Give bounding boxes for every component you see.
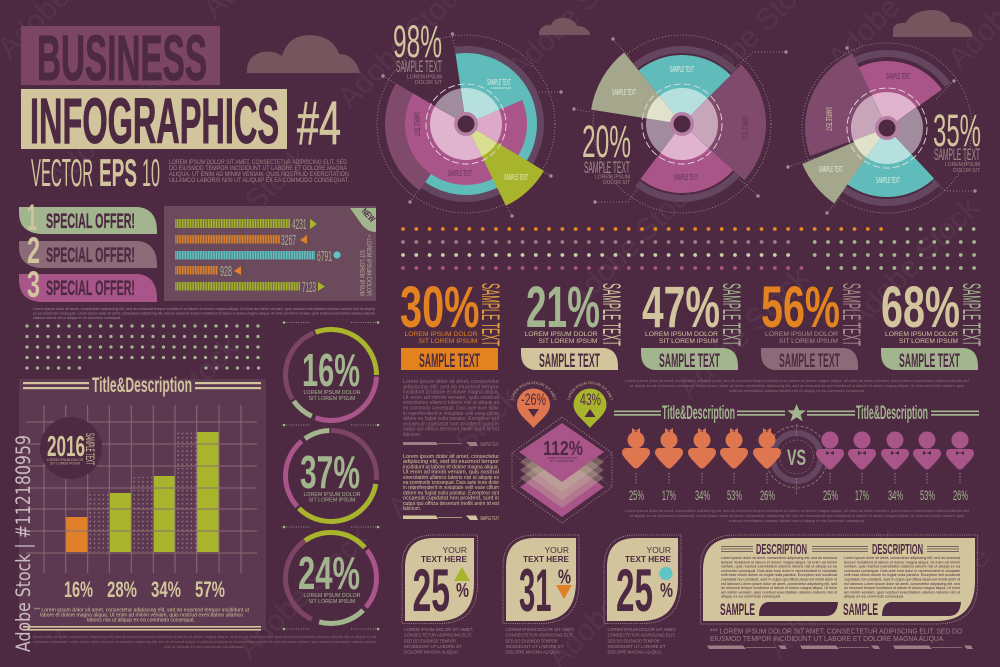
card 31% down (503, 535, 579, 624)
figure 4 (913, 432, 941, 503)
ring chart 24%: LOREM IPSUM DOLOR (304, 593, 360, 599)
sample pill 1 (720, 600, 838, 619)
right paragraph bottom: Lorem ipsum dolor sit amet, consectetur adipiscing elit, sed do eiusmod tempor incididunt ut labore et dolore magna aliqua. Ut enim ad minim veniam, quis nostrud exercitation ullamco laboris nisi (625, 508, 969, 513)
description column 2: veniam, quis nostrud exercitation ullamco laboris nisi ut aliquip ex ea (844, 565, 961, 569)
description column 2: commodo consequat. Duis aute irure dolor in reprehenderit in voluptate (844, 569, 960, 573)
vertical note: • LOREM IPSUM DOLOR (365, 235, 371, 297)
description column 1: cupidatat non proident, sunt in culpa qui officia deserunt mollit anim id (721, 578, 837, 582)
stat 47%: 47% (642, 275, 720, 340)
special offer 2: SPECIAL OFFER! (46, 244, 135, 267)
text block cream: ea commodo consequat. Duis aute irure dolor (403, 480, 499, 486)
stat 47%: SAMPLE TEXT (717, 283, 745, 346)
stat 21%: 21% (526, 275, 600, 340)
stock watermark pattern: Adobe Stock (42, 501, 186, 645)
pie labels: SAMPLE TEXT (612, 87, 636, 97)
stat 68%: 68% (881, 275, 960, 340)
text block cream: Lorem ipsum dolor sit amet, consectetur (403, 454, 499, 460)
stat 68% (881, 275, 985, 372)
right paragraph top (625, 378, 969, 393)
description card: DESCRIPTION (872, 541, 923, 558)
stat 47%: LOREM IPSUM DOLOR (645, 331, 718, 338)
caption 1: DOLORE MAGNA ALIQUA. (404, 650, 459, 656)
sample pill 1: SAMPLE (720, 600, 755, 619)
stock watermark pattern: Adobe Stock (842, 191, 986, 335)
figure 3 (688, 428, 716, 503)
caption 1: CONSECTETUR ADIPISCING ELIT, (404, 633, 472, 639)
stock watermark pattern: Adobe Stock (42, 51, 186, 195)
ring chart 16%: LOREM IPSUM DOLOR (304, 390, 360, 396)
panel: horizontal bars (164, 206, 378, 301)
stock watermark pattern: Adobe Stock (382, 381, 526, 525)
pie labels: SAMPLE TEXT (670, 64, 694, 74)
figure 5 (946, 432, 974, 503)
intro text: ULLAMCO LABORIS NISI UT ALIQUIP EX EA COMMODO CONSEQUAT. (169, 178, 349, 184)
description column 2: Lorem ipsum dolor sit amet, consectetur adipiscing elit, sed do eiusmod (844, 556, 960, 560)
stat 21% (521, 275, 625, 372)
layered diamond 112%: 112% (543, 438, 583, 460)
chart labels: 28% (107, 577, 137, 602)
pin 43% (567, 382, 613, 428)
stock credit vertical: Adobe Stock | #112180959 (12, 435, 35, 652)
caption 1: INCIDIDUNT UT LABORE ET (404, 644, 462, 650)
stat 56% (761, 275, 865, 372)
bar 3267 (175, 232, 307, 249)
separator cream: SAMPLE TEXT (480, 516, 499, 522)
text block cream: exercitation ullamco laboris nisi ut aliquip ex (403, 475, 499, 481)
description column 1: veniam, quis nostrud exercitation ullamco laboris nisi ut aliquip ex ea (721, 565, 838, 569)
description column 2: do eiusmod tempor incididunt ut labore et dolore magna aliqua. Ut enim (844, 586, 960, 590)
text block cream: Ut enim ad minim veniam, quis nostrud (403, 470, 499, 476)
caption 2 (506, 627, 574, 656)
stat 30%: 30% (400, 275, 480, 340)
card 25% up: YOUR (442, 545, 467, 555)
text block cream: culpa qui officia deserunt mollit anim id est (403, 501, 500, 507)
ring chart 37%: SIT LOREM IPSUM (308, 498, 356, 504)
stock watermark pattern: Adobe Stock (102, 331, 246, 475)
ring chart 16%: 16% (302, 344, 360, 396)
caption 3: INCIDIDUNT UT LABORE ET (608, 644, 666, 650)
stock watermark pattern: Adobe Stock (672, 261, 816, 405)
pie chart 20%: SAMPLE TEXT (584, 158, 630, 177)
stock watermark pattern: Adobe Stock (762, 521, 906, 665)
pin -26%: -26% (521, 390, 546, 409)
caption 3: LOREM IPSUM DOLOR SIT AMET, (608, 627, 676, 633)
description column 2: est laborum.Lorem ipsum dolor sit amet, consectetur adipiscing elit, sed (844, 582, 960, 586)
chart footnote (34, 608, 250, 624)
card 25% up (402, 535, 478, 624)
chart footnote: laboris nisi ut aliquip ex ea commodo consequat. (87, 618, 195, 624)
ring chart 37%: LOREM IPSUM DOLOR (304, 492, 360, 498)
description column 1: commodo consequat. Duis aute irure dolor in reprehenderit in voluptate (721, 569, 837, 573)
text block faded: Ut enim ad minim veniam, quis nostrud (403, 395, 499, 401)
sample pill 2: SAMPLE (843, 600, 878, 619)
dotted background bars (88, 430, 197, 552)
stat 21%: LOREM IPSUM DOLOR (524, 331, 598, 338)
stat 68%: SAMPLE TEXT (957, 283, 985, 346)
special offer 1 (19, 197, 157, 238)
chart labels: 34% (151, 577, 181, 602)
pie labels: SAMPLE TEXT (448, 168, 472, 178)
small text under offers: ullamco laboris nisi ut aliquip ex ea commodo consequat. (33, 315, 121, 320)
ring chart 37%: 37% (300, 446, 360, 498)
special offer 1: SPECIAL OFFER! (46, 210, 135, 233)
chart labels: 16% (64, 577, 93, 602)
separator faded (403, 442, 499, 448)
small text under chart: nisi ut aliquip ex ea commodo consequat. (164, 644, 244, 649)
caption 3 (608, 627, 676, 656)
pie labels: LOREM IPSUM (491, 86, 512, 90)
text block faded: exercitation ullamco laboris nisi ut aliquip ex (403, 400, 499, 406)
ring chart 24%: 24% (298, 547, 360, 599)
description column 1: velit esse cillum dolore eu fugiat nulla pariatur. Excepteur sint occaecat (721, 573, 837, 577)
subtitle: vector eps 10: VECTOR (31, 152, 93, 195)
ring separators (283, 321, 379, 630)
figure 2: 17% (855, 488, 869, 503)
chart footnote: labore et dolore magna aliqua. Ut enim ad minim veniam, quis nostrud exercitation ullamco (40, 612, 243, 618)
caption 1 (404, 627, 473, 656)
new badge: NEW (360, 206, 378, 224)
bar 7123: 7123 (302, 279, 316, 296)
card captions (404, 627, 676, 656)
card 31% down: 31 (519, 557, 552, 624)
ring chart 24%: SIT LOREM IPSUM (308, 599, 356, 605)
text block faded: occaecat cupidatat non proident, sunt in (403, 421, 499, 427)
small text under offers (33, 306, 375, 320)
pie chart 98%: 98% (393, 16, 442, 67)
footnote: *** LOREM IPSUM DOLOR SIT AMET, CONSECTETUR ADIPISCING ELIT, SED DO (710, 626, 962, 636)
text block faded: Lorem ipsum dolor sit amet, consectetur (403, 379, 499, 385)
stat 21%: SAMPLE TEXT (597, 283, 625, 346)
text block cream: incididunt ut labore et dolore magna aliqua. (403, 464, 499, 470)
pie chart 35% (782, 23, 992, 233)
text block cream: dolore eu fugiat nulla pariatur. Excepteur sint (403, 490, 500, 496)
bar 7123 (175, 279, 325, 296)
figure 5: 26% (953, 488, 968, 503)
icon: large cloud (247, 35, 360, 73)
description column 1: ad minim veniam, quis nostrud exercitation ullamco laboris nisi ut (721, 590, 837, 594)
pie labels: SAMPLE TEXT (824, 107, 834, 131)
dot grid left (27, 326, 259, 368)
year badge: 2016 (47, 431, 85, 463)
description column 2: aliquip ex ea commodo consequat. (844, 595, 904, 599)
stat 47% (641, 275, 745, 372)
footnote: EIUSMOD TEMPOR INCIDIDUNT UT LABORE ET DOLORE MAGNA ALIQUA. (710, 634, 945, 643)
title: Business (21, 22, 220, 94)
bar 928: 928 (220, 263, 232, 280)
text block faded: culpa qui officia deserunt mollit anim id est (403, 427, 500, 433)
year badge: LOREM IPSUM DOLOR (47, 458, 84, 462)
description column 1: est laborum.Lorem ipsum dolor sit amet, consectetur adipiscing elit, sed (721, 582, 837, 586)
pink figures (816, 432, 974, 503)
figure 5: 26% (760, 488, 775, 503)
right paragraph bottom: nostrud exercitation ullamco laboris nisi ut aliquip ex ea commodo consequat. (729, 518, 865, 523)
special offer 2: 2 (27, 230, 40, 271)
pin -26%: LOREM IPSUM DOLOR SIT AMET (510, 382, 556, 400)
text block faded: ea commodo consequat. Duis aute irure dolor (403, 406, 499, 412)
text block faded: dolore eu fugiat nulla pariatur. Excepteur sint (403, 416, 500, 422)
pie chart 98% (377, 16, 563, 218)
text block cream: occaecat cupidatat non proident, sunt in (403, 496, 499, 502)
vertical note (358, 235, 371, 297)
figure 1 (622, 428, 650, 503)
bar 3267: 3267 (281, 232, 296, 249)
separator cream (403, 516, 499, 522)
title: #4: #4 (297, 89, 341, 157)
pie labels (412, 77, 528, 182)
pie chart 20% (572, 19, 788, 229)
coral figures (622, 428, 781, 503)
stock watermark pattern: Adobe Stock (232, 521, 376, 665)
title: Infographics: INFOGRAPHICS (30, 85, 279, 157)
layered diamond 112% (512, 417, 612, 523)
card 25% circle: YOUR (646, 545, 671, 555)
text block cream: laborum. (403, 506, 421, 512)
description card: DESCRIPTION (756, 541, 807, 558)
stat 21%: SAMPLE TEXT (539, 351, 600, 372)
caption 3: SED DO EIUSMOD TEMPOR (608, 638, 660, 644)
right paragraph bottom (625, 508, 969, 523)
text block cream: adipiscing elit, sed do eiusmod tempor (403, 459, 499, 465)
description column 2: ad minim veniam, quis nostrud exercitation ullamco laboris nisi ut (844, 590, 960, 594)
special offer 3: 3 (27, 264, 40, 305)
stat 30% (400, 275, 504, 372)
separator bars (707, 646, 973, 649)
vs badge: VS (787, 445, 806, 470)
card 31% down: TEXT HERE (523, 555, 570, 564)
footnote (710, 626, 962, 643)
card 25% circle: 25 (616, 557, 653, 624)
stock watermark pattern: Adobe Stock (172, 141, 316, 285)
pie chart 98%: LOREM IPSUM (407, 74, 442, 80)
text block faded (403, 379, 500, 438)
sample pill 2 (843, 600, 961, 619)
pie labels: SAMPLE TEXT (412, 112, 422, 136)
text block cream (403, 454, 500, 512)
stat 30%: SAMPLE TEXT (419, 351, 480, 372)
caption 2: SED DO EIUSMOD TEMPOR (506, 638, 558, 644)
icon: star (787, 404, 806, 421)
ring chart 16% (268, 312, 394, 438)
bar 4231 (175, 216, 317, 233)
stat 30%: SAMPLE TEXT (476, 283, 504, 346)
description column 1: do eiusmod tempor incididunt ut labore et dolore magna aliqua. Ut enim (721, 586, 837, 590)
stat 56%: LOREM IPSUM DOLOR (765, 331, 838, 338)
figure 2: 17% (662, 488, 676, 503)
pie chart 20%: LOREM IPSUM (595, 174, 630, 180)
pin 43%: LOREM IPSUM DOLOR SIT AMET (567, 382, 613, 400)
card 25% up: 25 (412, 557, 450, 624)
pie labels: SAMPLE TEXT (487, 77, 511, 87)
stat 56%: SIT LOREM IPSUM (779, 338, 838, 345)
bar 6791 (175, 248, 341, 265)
pie labels: SAMPLE TEXT (740, 116, 750, 140)
icon: cloud right (893, 10, 972, 37)
ring chart 16%: SIT LOREM IPSUM (308, 396, 356, 402)
small text under offers: Lorem ipsum dolor sit amet, consectetur adipiscing elit, sed do eiusmod tempor incididunt ut labore et dolore magna aliqua. Ut enim ad minim veniam, quis nostrud exercitation ullamco laboris nisi ut aliquip (33, 306, 375, 311)
pie chart 98%: DOLOR SIT (415, 80, 442, 86)
pie chart 98%: SAMPLE TEXT (396, 57, 442, 76)
title row left: Title&Description (662, 403, 735, 424)
text block faded: incididunt ut labore et dolore magna aliqua. (403, 390, 499, 396)
description column 2 (844, 556, 961, 599)
ring chart 24% (267, 514, 395, 642)
stock watermark pattern: Adobe (912, 540, 996, 625)
caption 1: SED DO EIUSMOD TEMPOR (404, 638, 456, 644)
card 25% circle: % (660, 580, 673, 602)
right paragraph bottom: ut aliquip ex ea commodo consequat. Lorem ipsum dolor sit amet, consectetur adipiscing elit, sed do eiusmod tempor incididunt ut labore et dolore magna aliqua. Ut enim ad minim veniam, quis (630, 513, 964, 518)
year badge: SAMPLE TEXT (83, 433, 97, 465)
description card (700, 535, 978, 624)
figure 4 (720, 428, 748, 503)
text block faded: laborum. (403, 432, 421, 438)
description column 1 (721, 556, 838, 599)
stat 56%: SAMPLE TEXT (779, 351, 840, 372)
separator faded: SAMPLE TEXT (480, 442, 499, 448)
icon: cloud middle (539, 18, 590, 35)
intro text (169, 160, 349, 184)
small text under offers: ex ea commodo consequat. Lorem ipsum dolor sit amet, consectetur adipiscing elit, sed do eiusmod tempor incididunt ut labore et dolore magna aliqua. Ut enim ad minim veniam, quis nostrud exercitation ullamco laboris (33, 310, 375, 316)
caption 2: INCIDIDUNT UT LABORE ET (506, 644, 564, 650)
stat 56%: SAMPLE TEXT (837, 283, 865, 346)
stat 47%: SIT LOREM IPSUM (659, 338, 718, 345)
stat 68%: LOREM IPSUM DOLOR (885, 331, 958, 338)
pie labels (819, 71, 910, 185)
description column 1: tempor incididunt ut labore et dolore magna aliqua. Ut enim ad minim (721, 560, 837, 564)
intro text: LOREM IPSUM DOLOR SIT AMET, CONSECTETUR ADIPISCING ELIT, SED (169, 160, 348, 166)
bar 6791: 6791 (317, 248, 332, 265)
description column 2: velit esse cillum dolore eu fugiat nulla pariatur. Excepteur sint occaecat (844, 573, 960, 577)
caption 1: LOREM IPSUM DOLOR SIT AMET, (404, 627, 473, 633)
dot grid right (403, 229, 975, 268)
year badge (40, 417, 102, 479)
caption 2: DOLORE MAGNA ALIQUA. (506, 650, 560, 656)
figure 4: 53% (727, 488, 742, 503)
subtitle: vector eps 10: EPS (99, 152, 137, 195)
text: 10 (142, 152, 160, 195)
new badge (350, 206, 378, 232)
figure 1: 25% (823, 488, 838, 503)
card 25% circle: TEXT HERE (625, 555, 672, 564)
pie labels (612, 64, 750, 182)
figure 1: 25% (629, 488, 644, 503)
title: Business: BUSINESS (37, 22, 207, 94)
description column 2: cupidatat non proident, sunt in culpa qui officia deserunt mollit anim id (844, 578, 960, 582)
card 31% down: % (558, 566, 571, 588)
special offer 3 (19, 264, 157, 305)
caption 2: LOREM IPSUM DOLOR SIT AMET, (506, 627, 574, 633)
small text under chart: ipsum dolor sit amet, consectetur adipiscing elit, sed do eiusmod tempor incididunt ut labore et dolore magna aliqua. Ut enim ad minim veniam, quis nostrud exercitation ullamco laboris nisi ut aliquip ex ea (33, 634, 377, 639)
text block cream: in reprehenderit in voluptate velit esse cillum (403, 485, 499, 491)
pin -26% (510, 382, 556, 428)
bar 928 (175, 263, 241, 280)
small text under chart (33, 634, 377, 649)
right paragraph top: Lorem ipsum dolor sit amet, consectetur adipiscing elit, sed do eiusmod tempor incididunt ut labore et dolore magna aliqua. Ut enim ad minim veniam, quis nostrud exercitation ullamco laboris nisi (625, 378, 969, 383)
year badge: SIT LOREM IPSUM (50, 462, 80, 466)
intro text: DO EIUSMOD TEMPOR INCIDIDUNT UT LABORE ET DOLORE MAGNA (169, 166, 347, 172)
stock watermark pattern: Adobe Stock (562, 171, 706, 315)
stat 21%: SIT LOREM IPSUM (538, 338, 598, 345)
stat 30%: LOREM IPSUM DOLOR (404, 331, 478, 338)
pie labels: SAMPLE TEXT (674, 172, 698, 182)
caption 3: CONSECTETUR ADIPISCING ELIT, (608, 633, 676, 639)
panel: bar chart (19, 374, 266, 631)
description column 2: tempor incididunt ut labore et dolore magna aliqua. Ut enim ad minim (844, 560, 960, 564)
caption 3: DOLORE MAGNA ALIQUA. (608, 650, 662, 656)
title: Infographics (21, 85, 287, 157)
pin 43%: 43% (580, 390, 601, 409)
pie labels: SAMPLE TEXT (819, 164, 843, 174)
special offer 3: SPECIAL OFFER! (46, 277, 135, 300)
card 31% down: YOUR (544, 545, 569, 555)
intro text: ALIQUA. UT ENIM AD MINIM VENIAM, QUIS NOSTRUD EXERCITATION (169, 172, 349, 178)
pie chart 35%: LOREM IPSUM (945, 162, 980, 168)
right paragraph top: ut aliquip ex ea commodo consequat. Lorem ipsum dolor sit amet, consectetur adipiscing elit, sed do eiusmod tempor incididunt ut labore et dolore magna aliqua. Ut enim ad minim veniam, quis (630, 383, 964, 388)
vertical note: SIT LOREM IPSUM (358, 250, 364, 296)
pie chart 98%: SAMPLE TEXT (504, 172, 528, 182)
right paragraph top: nostrud exercitation ullamco laboris nisi ut aliquip ex ea commodo consequat. (729, 388, 865, 393)
heading lines (721, 546, 959, 552)
ring chart 37% (267, 412, 395, 540)
pie chart 20%: DOLOR SIT (603, 180, 630, 186)
special offer 1: 1 (27, 197, 37, 238)
stat 56%: 56% (761, 275, 840, 340)
text block faded: in reprehenderit in voluptate velit esse cillum (403, 411, 499, 417)
figure 2 (848, 432, 876, 503)
figure 2 (655, 428, 683, 503)
chart labels (64, 577, 225, 602)
card 25% circle (604, 535, 681, 624)
text block faded: adipiscing elit, sed do eiusmod tempor (403, 384, 499, 390)
caption 2: CONSECTETUR ADIPISCING ELIT, (506, 633, 574, 639)
figure 3 (881, 432, 909, 503)
vs badge (766, 424, 828, 495)
layered diamond 112%: SIT LOREM IPSUM (550, 459, 575, 463)
chart labels: 57% (195, 577, 225, 602)
pie chart 35%: SAMPLE TEXT (886, 71, 910, 81)
stat 68%: SIT LOREM IPSUM (899, 338, 958, 345)
figure 4: 53% (920, 488, 935, 503)
figure 5 (753, 428, 781, 503)
pie labels: SAMPLE TEXT (876, 175, 900, 185)
description column 1: Lorem ipsum dolor sit amet, consectetur adipiscing elit, sed do eiusmod (721, 556, 837, 560)
figure 1 (816, 432, 844, 503)
pie chart 20%: 20% (582, 116, 631, 167)
card 25% up: TEXT HERE (421, 555, 468, 564)
stat 30%: SIT LOREM IPSUM (418, 338, 478, 345)
chart footnote: *** Lorem ipsum dolor sit amet, consectetur adipiscing elit, sed do eiusmod tempor incididunt ut (34, 608, 250, 614)
chart bars (66, 432, 219, 552)
pie chart 35%: DOLOR SIT (953, 168, 980, 174)
figure 3: 34% (888, 488, 903, 503)
small text under chart: commodo consequat. Lorem ipsum dolor sit amet, consectetur adipiscing elit, sed do eiusmod tempor incididunt ut labore et dolore magna aliqua. Ut enim ad minim veniam, quis nostrud exercitation ullamco laboris (33, 639, 376, 644)
description column 1: aliquip ex ea commodo consequat. (721, 595, 781, 599)
figure 3: 34% (695, 488, 710, 503)
chart heading: Title&Description (92, 374, 192, 397)
card 25% up: % (456, 580, 469, 602)
special offer 2 (19, 230, 157, 271)
stat 47%: SAMPLE TEXT (659, 351, 720, 372)
bar 4231: 4231 (292, 216, 306, 233)
layered diamond 112%: LOREM IPSUM DOLOR (547, 456, 577, 460)
